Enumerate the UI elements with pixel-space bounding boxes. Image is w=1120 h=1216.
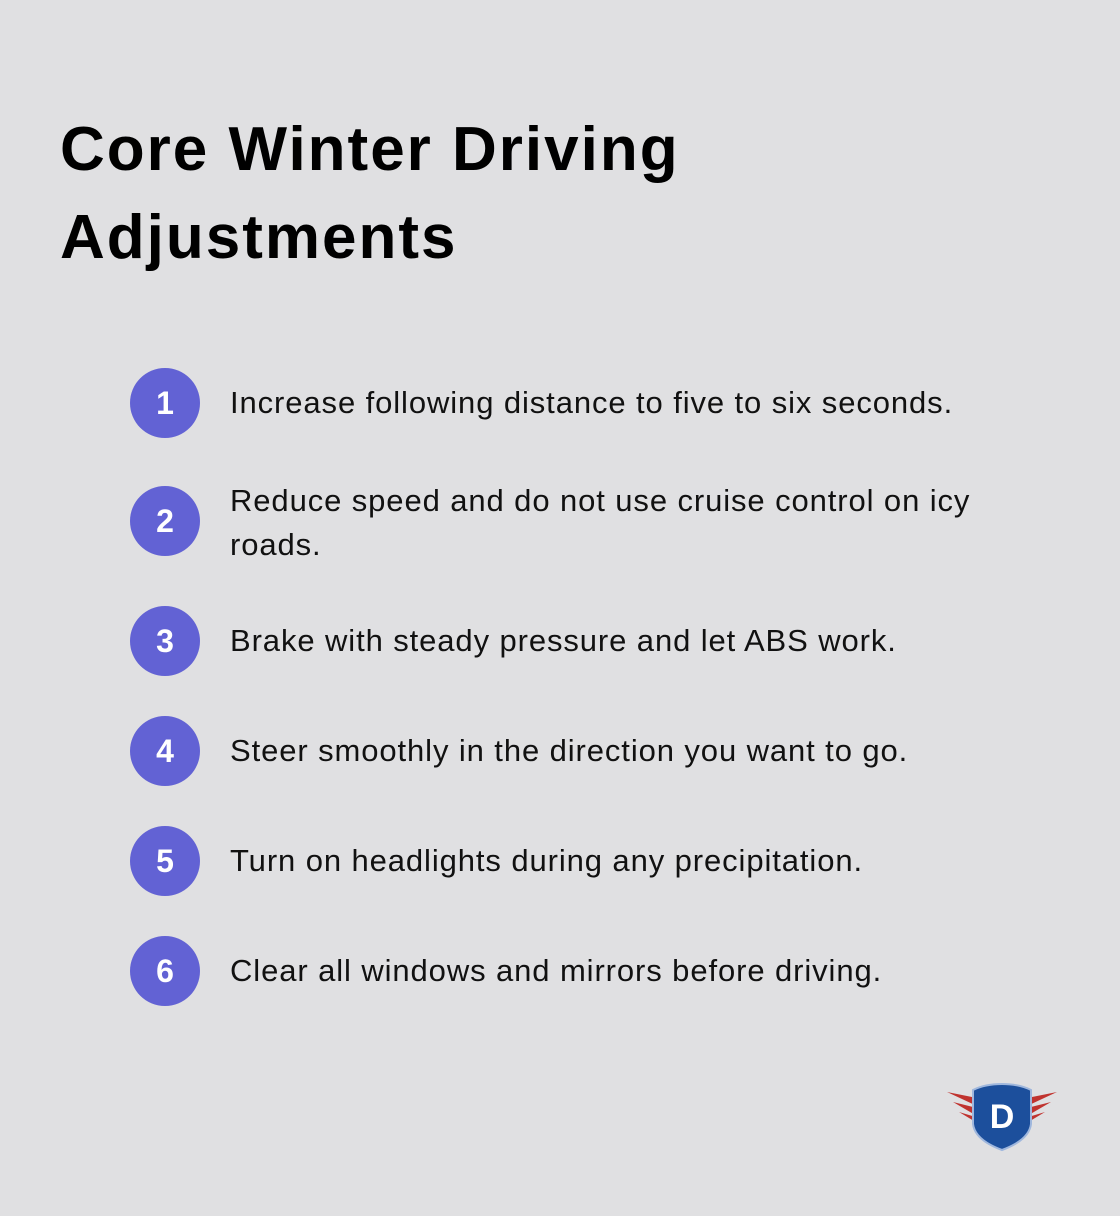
- title: [60, 115, 680, 272]
- item 6: [130, 936, 882, 1006]
- icon: logo shield: [947, 1083, 1057, 1151]
- item 5: 5: [156, 843, 174, 879]
- title: Core Winter Driving: [60, 115, 680, 184]
- item 1: Increase following distance to five to six seconds.: [230, 385, 953, 420]
- icon: logo shield: D: [990, 1098, 1014, 1136]
- item 5: [130, 826, 863, 896]
- item 5: Turn on headlights during any precipitation.: [230, 843, 863, 878]
- item 6: Clear all windows and mirrors before driving.: [230, 953, 882, 988]
- item 3: 3: [156, 623, 174, 659]
- item 2: 2: [156, 503, 174, 539]
- title: Adjustments: [60, 203, 457, 272]
- item 3: [130, 606, 897, 676]
- item 4: [130, 716, 908, 786]
- item 4: Steer smoothly in the direction you want to go.: [230, 733, 908, 768]
- item 1: [130, 368, 953, 438]
- item 6: 6: [156, 953, 174, 989]
- item 3: Brake with steady pressure and let ABS work.: [230, 623, 897, 658]
- item 4: 4: [156, 733, 174, 769]
- item 2: Reduce speed and do not use cruise control on icy roads.: [230, 483, 970, 562]
- item 1: 1: [156, 385, 174, 421]
